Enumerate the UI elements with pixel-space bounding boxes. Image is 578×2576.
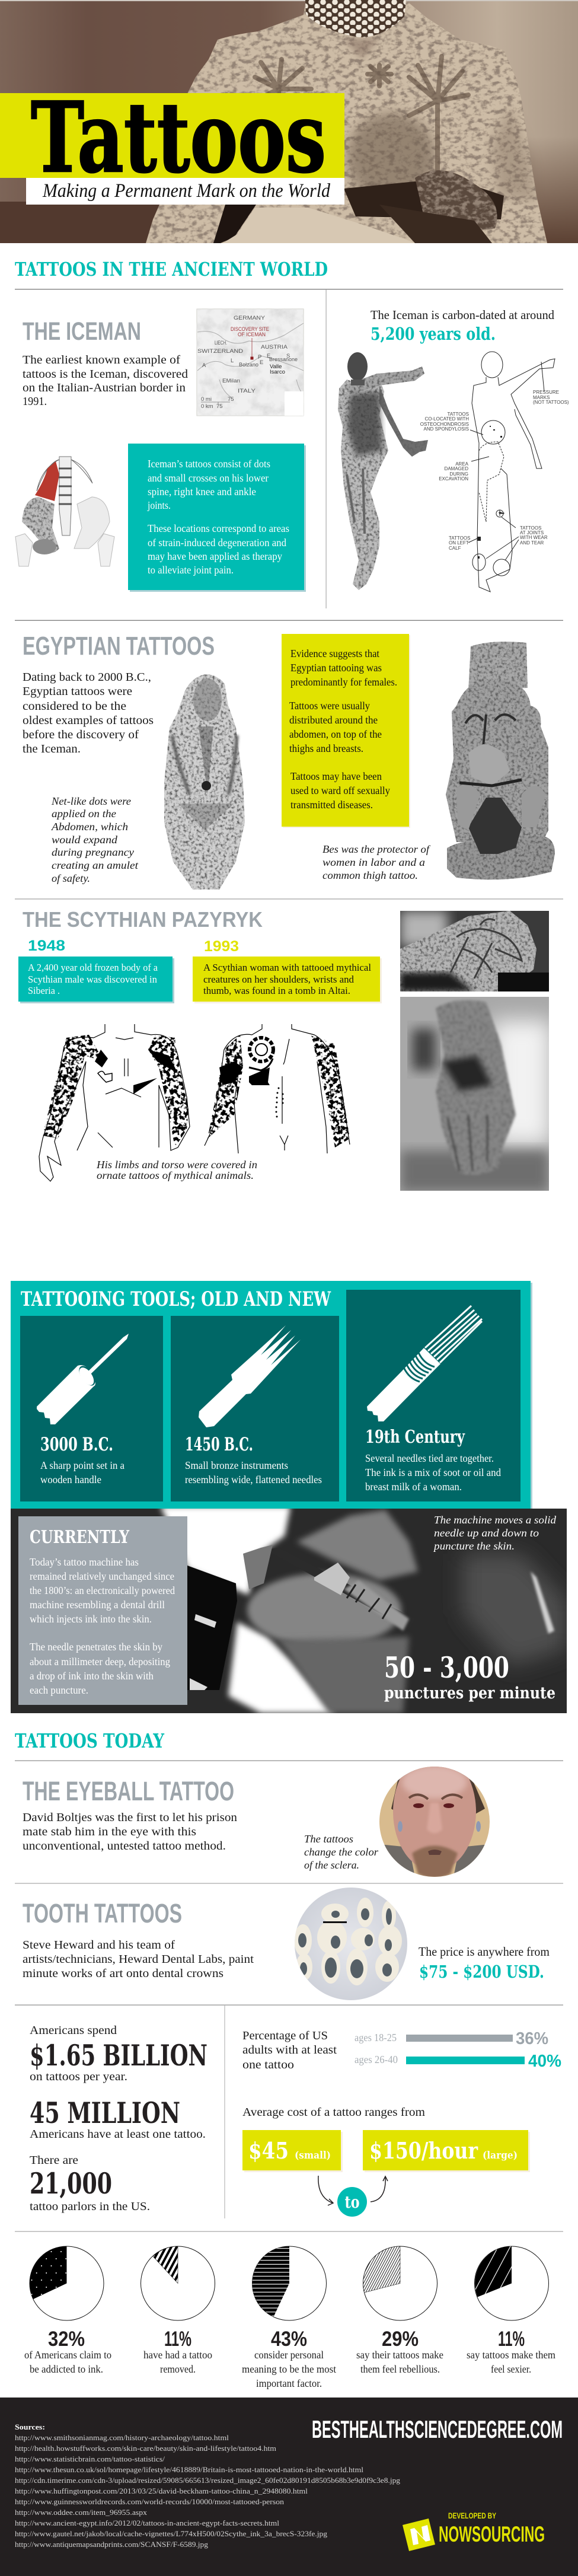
heading: tools: TATTOOING TOOLS; OLD AND NEW (21, 1287, 331, 1311)
callout: evidence: Egyptian tattooing was (290, 662, 382, 674)
callout: tattoo locations: of strain-induced degeneration and (148, 537, 286, 549)
photo: tattooed teeth (294, 1888, 407, 2000)
title banner (0, 81, 344, 205)
description (365, 1452, 501, 1493)
callout: tattoo locations: spine, right knee and ankle (148, 486, 256, 498)
callout: 1993: A Scythian woman with tattooed mythical (203, 962, 371, 973)
percentage label: adults with at least (242, 2043, 337, 2057)
caption: net-like dots: Abdomen, which (51, 821, 128, 833)
map of discovery site: DISCOVERY SITE (231, 326, 269, 333)
sources list: http://www.antiquemapsandprints.com/SCANSF/F-6589.jpg (15, 2540, 209, 2549)
diagram: iceman tattoo locations: AND SPONDYLOSIS (424, 426, 469, 432)
description (40, 1459, 124, 1485)
description (185, 1459, 322, 1485)
callout: evidence: used to ward off sexually (290, 785, 390, 796)
diagram: iceman tattoo locations: AREA (455, 461, 469, 467)
diagram: iceman tattoo locations: TATTOOS (449, 535, 470, 541)
photo: tattooed shoulder (400, 911, 551, 991)
callout: 1948: A 2,400 year old frozen body of a (28, 962, 158, 973)
bar chart: adults with tattoos: ages 26-40 (355, 2054, 398, 2065)
eyeball text: mate stab him in the eye with this (23, 1825, 196, 1838)
photo: man with eyeball tattoo (379, 1767, 490, 1877)
panel: pie charts (24, 2246, 555, 2389)
currently text: machine resembling a dental drill (30, 1599, 165, 1611)
pie: 29% rebellious (356, 2246, 443, 2375)
diagram: iceman tattoo locations: PRESSURE (533, 390, 559, 395)
caption: bes (322, 843, 431, 881)
yellow title block (0, 93, 344, 178)
eyeball text: David Boltjes was the first to let his prison (23, 1811, 237, 1824)
callout: tattoo locations: Iceman’s tattoos consist of dots (148, 458, 270, 470)
currently text: remained relatively unchanged since (30, 1570, 174, 1582)
pie: 32% addicted: 32% (48, 2328, 85, 2351)
map of discovery site: S (286, 353, 290, 359)
map of discovery site: 0 mi (201, 396, 212, 403)
panel: national statistics (30, 2024, 207, 2213)
date: 3000 B.C.: 3000 B.C. (40, 1434, 113, 1455)
main title: Tattoos (31, 81, 326, 195)
currently text: which injects ink into the skin. (30, 1613, 152, 1625)
heading: scythian pazyryk: THE SCYTHIAN PAZYRYK (23, 907, 263, 932)
sources list: http://www.oddee.com/item_96955.aspx (15, 2508, 148, 2517)
pie: 43% personal meaning (242, 2246, 336, 2389)
pie: 32% addicted: be addicted to ink. (30, 2363, 103, 2375)
year: 1993: 1993 (204, 938, 239, 955)
callout: tattoo locations: to alleviate joint pain. (148, 564, 234, 576)
egyptian intro text (23, 671, 154, 755)
diagram: iceman tattoo locations: ON LEFT (449, 540, 469, 546)
bar chart: adults with tattoos (355, 2029, 561, 2071)
sources list (15, 2422, 401, 2549)
caption: sclera: of the sclera. (304, 1859, 359, 1871)
illustration: tattooed torso front and back (39, 1024, 350, 1181)
diagram: iceman tattoo locations: EXCAVATION (439, 476, 468, 482)
currently text: about a millimeter deep, depositing (30, 1656, 170, 1668)
diagram: iceman tattoo locations: TATTOOS (448, 412, 469, 417)
caption: net-like dots (51, 795, 139, 884)
arrow: to large (371, 2176, 388, 2202)
price box: large (363, 2130, 530, 2172)
developer credit (403, 2511, 545, 2551)
callout: evidence: predominantly for females. (290, 676, 397, 688)
eyeball text: unconventional, untested tattoo method. (23, 1839, 226, 1853)
sources list: http://www.smithsonianmag.com/history-archaeology/tattoo.html (15, 2433, 229, 2442)
egyptian intro text: the Iceman. (23, 742, 81, 755)
panel: tattooing tools (11, 1281, 532, 1510)
bar chart: adults with tattoos: 40% (528, 2052, 561, 2071)
eyeball text (23, 1811, 237, 1853)
subtitle block: Making a Permanent Mark on the World (42, 180, 330, 202)
callout: tattoo locations: may have been applied as therapy (148, 550, 282, 562)
developer credit: DEVELOPED BY (448, 2511, 496, 2520)
price box: large: (large) (483, 2150, 518, 2161)
heading: egyptian tattoos: EGYPTIAN TATTOOS (23, 632, 215, 661)
heading: eyeball tattoo: THE EYEBALL TATTOO (23, 1776, 234, 1806)
stat: spending: Americans spend (30, 2024, 117, 2037)
caption: sclera (304, 1833, 379, 1871)
panel: tooth tattoos (23, 1888, 550, 2000)
sources list: Sources: (15, 2422, 45, 2431)
date: 1450 B.C.: 1450 B.C. (185, 1434, 253, 1455)
pie: 43% personal meaning: consider personal (254, 2349, 324, 2361)
carbon dating text (371, 308, 554, 344)
stat: 45 million: Americans have at least one tattoo. (30, 2128, 206, 2141)
currently text: the 1800’s: an electronically powered (30, 1585, 175, 1596)
price box: small (242, 2130, 343, 2172)
pie: 29% rebellious: 29% (382, 2328, 419, 2351)
stat: parlors: There are (30, 2154, 78, 2167)
stat: parlors: tattoo parlors in the US. (30, 2200, 150, 2213)
caption: net-like dots: during pregnancy (52, 846, 134, 858)
price text: The price is anywhere from (419, 1944, 550, 1959)
iceman intro text: tattoos is the Iceman, discovered (23, 368, 188, 381)
badge: to (337, 2187, 367, 2217)
pie: 11% removed: removed. (160, 2363, 196, 2375)
stat: 45 million (30, 2096, 206, 2141)
map of discovery site: OF ICEMAN (238, 331, 266, 338)
pie: 43% personal meaning: meaning to be the most (242, 2363, 336, 2375)
panel: scythian pazyryk (18, 907, 551, 1192)
map of discovery site: GERMANY (234, 315, 266, 321)
caption: machine moves needle: The machine moves a solid (434, 1514, 557, 1526)
description: Several needles tied are together. (365, 1452, 494, 1464)
card: 1450 B.C. (171, 1316, 339, 1501)
sources list: http://www.ancient-egypt.info/2012/02/tattoos-in-ancient-egypt-facts-secrets.html (15, 2518, 279, 2527)
diagram: iceman tattoo locations: TATTOOS (520, 525, 541, 531)
map of discovery site: AUSTRIA (261, 344, 288, 350)
card: 3000 B.C. (20, 1316, 163, 1501)
arrow: small to (318, 2176, 333, 2205)
description: Small bronze instruments (185, 1459, 288, 1471)
map of discovery site: Isarco (270, 369, 285, 375)
caption: net-like dots: creating an amulet (52, 859, 139, 871)
section heading: ancient world: TATTOOS IN THE ANCIENT WORLD (15, 258, 328, 280)
map of discovery site: ITALY (238, 388, 256, 394)
egyptian intro text: before the discovery of (23, 728, 139, 741)
callout: 1993 (193, 957, 382, 1003)
panel: eyeball tattoo (23, 1767, 490, 1877)
price box: small: (small) (295, 2150, 331, 2161)
currently text (30, 1556, 175, 1696)
stat: 45 million: 45 MILLION (30, 2096, 180, 2130)
footer (0, 2398, 578, 2576)
caption: net-like dots: applied on the (52, 808, 116, 820)
stat: spending: $1.65 BILLION (30, 2038, 207, 2073)
pie: 29% rebellious: say their tattoos make (356, 2349, 443, 2361)
percentage label (242, 2029, 337, 2071)
diagram: iceman tattoo locations: AND TEAR (520, 540, 544, 546)
callout: evidence (282, 634, 410, 828)
callout: 1993: thumb, was found in a tomb in Altai. (203, 985, 350, 996)
panel: percentage and cost (242, 2029, 561, 2217)
callout: tattoo locations (128, 444, 306, 592)
currently text: a drop of ink into the skin with (30, 1670, 154, 1682)
caption: limbs and torso: ornate tattoos of mythical animals. (97, 1169, 254, 1181)
iceman age: 5,200 years old. (371, 324, 496, 344)
description: resembling wide, flattened needles (185, 1474, 322, 1485)
iceman intro text: on the Italian-Austrian border in (23, 381, 186, 394)
carbon dating text: The Iceman is carbon-dated at around (371, 308, 554, 322)
egyptian intro text: Egyptian tattoos were (23, 685, 132, 698)
caption: net-like dots: would expand (52, 834, 118, 846)
map of discovery site: L (231, 358, 234, 364)
bar chart: adults with tattoos: ages 18-25 (355, 2032, 397, 2043)
callout: evidence: transmitted diseases. (290, 799, 373, 811)
caption: limbs and torso: His limbs and torso were covered in (96, 1159, 257, 1171)
pie: 11% sexier: feel sexier. (491, 2363, 531, 2375)
sources list: http://www.huffingtonpost.com/2013/03/25/david-beckham-tattoo-china_n_2948080.html (15, 2486, 308, 2495)
currently text: Today’s tattoo machine has (30, 1556, 139, 1568)
caption: bes: common thigh tattoo. (322, 869, 418, 881)
map of discovery site: SWITZERLAND (197, 348, 243, 355)
iceman intro text (23, 353, 188, 408)
callout: evidence: distributed around the (289, 714, 378, 726)
iceman intro text: The earliest known example of (23, 353, 180, 366)
stat: spending: on tattoos per year. (30, 2070, 127, 2083)
description: A sharp point set in a (40, 1459, 124, 1471)
currently text: The needle penetrates the skin by (30, 1641, 162, 1653)
pie: 11% sexier: 11% (498, 2328, 525, 2351)
map of discovery site: Bressanone (269, 356, 298, 363)
sources list: http://www.statisticbrain.com/tattoo-statistics/ (15, 2454, 165, 2463)
caption: sclera: The tattoos (304, 1833, 353, 1845)
callout: tattoo locations: These locations correspond to areas (148, 522, 289, 534)
date: 19th century: 19th Century (365, 1427, 465, 1448)
map of discovery site: E (267, 353, 270, 359)
callout: evidence: abdomen, on top of the (289, 728, 382, 740)
egyptian intro text: considered to be the (23, 700, 126, 713)
diagram: iceman tattoo locations: (NOT TATTOOS) (533, 400, 569, 405)
caption: net-like dots: Net-like dots were (51, 795, 131, 807)
bar chart: adults with tattoos: 36% (516, 2029, 548, 2048)
photo: tattoo machine in hand (11, 1506, 567, 1713)
map of discovery site: 75 (228, 396, 234, 403)
heading: tooth tattoos: TOOTH TATTOOS (23, 1898, 182, 1928)
panel: the iceman (15, 308, 569, 592)
pie: 11% sexier (467, 2246, 555, 2375)
pie: 43% personal meaning: important factor. (256, 2377, 322, 2389)
callout: 1948: Scythian male was discovered in (28, 974, 157, 985)
caption: machine moves needle: puncture the skin. (433, 1540, 515, 1552)
caption: sclera: change the color (304, 1846, 379, 1858)
cost label: Average cost of a tattoo ranges from (242, 2106, 425, 2119)
diagram: iceman tattoo locations: CALF (449, 546, 461, 551)
card: 19th century (346, 1290, 520, 1501)
photo: iceman mummy (338, 352, 428, 590)
diagram: iceman tattoo locations: OSTEOCHONDROSIS (420, 422, 469, 427)
callout: evidence: Tattoos were usually (289, 700, 370, 712)
diagram: iceman tattoo locations: WITH WEAR (520, 535, 548, 540)
map of discovery site: A (202, 362, 206, 369)
description: breast milk of a woman. (365, 1481, 462, 1493)
year: 1948: 1948 (28, 938, 65, 954)
pie: 32% addicted (24, 2246, 111, 2375)
tooth text: minute works of art onto dental crowns (23, 1967, 223, 1980)
icon: tied needles (367, 1306, 482, 1421)
caption: machine moves needle (433, 1514, 557, 1552)
map of discovery site (197, 308, 304, 416)
map of discovery site: E (260, 359, 263, 366)
description: wooden handle (40, 1474, 101, 1485)
photo: tattooed figurine (164, 674, 245, 890)
diagram: iceman tattoo locations: MARKS (533, 395, 550, 400)
map of discovery site: LIECH. (215, 340, 227, 346)
diagram: iceman tattoo locations: DAMAGED (445, 466, 468, 471)
iceman intro text: 1991. (23, 395, 47, 408)
caption: bes: Bes was the protector of (322, 843, 431, 855)
section heading: tattoos today: TATTOOS TODAY (15, 1729, 164, 1752)
hero photo: tattooed woman (0, 0, 578, 243)
pie: 11% removed: 11% (164, 2328, 191, 2351)
map of discovery site: 75 (216, 403, 223, 410)
icon: nowsourcing logo (403, 2518, 435, 2551)
badge: to: to (345, 2192, 359, 2212)
map of discovery site: EMilan (222, 378, 240, 384)
sources list: http://www.gautel.net/jakob/local/cache-vignettes/L774xH500/02Scythe_ink_3a_brecS-323fe.jpg (15, 2529, 328, 2538)
stat: spending (30, 2024, 207, 2083)
caption: limbs and torso (96, 1159, 257, 1181)
diagram: iceman tattoo locations: CO-LOCATED WITH (424, 416, 469, 422)
tooth text: Steve Heward and his team of (23, 1939, 175, 1952)
callout: 1993: creatures on her shoulders, wrists and (203, 974, 354, 985)
callout: evidence: thighs and breasts. (289, 742, 363, 754)
sources list: http://www.guinnessworldrecords.com/world-records/10000/most-tattooed-person (15, 2497, 285, 2506)
price range: $75 - $200 USD. (419, 1962, 544, 1982)
map of discovery site: 0 km (201, 403, 213, 410)
diagram: iceman tattoo locations: AT JOINTS (520, 530, 544, 535)
percentage label: Percentage of US (242, 2029, 328, 2042)
currently text: each puncture. (30, 1684, 88, 1696)
stat: punctures per minute: punctures per minute (384, 1684, 555, 1703)
illustration: spine and pelvis (15, 457, 114, 566)
icon: sharp point in handle (37, 1334, 129, 1424)
description: The ink is a mix of soot or oil and (365, 1466, 501, 1478)
map of discovery site: Bolzano (239, 362, 258, 368)
panel: currently, tattoo machine photo (11, 1506, 567, 1713)
pie: 11% sexier: say tattoos make them (467, 2349, 555, 2361)
map of discovery site: Valle (270, 364, 282, 370)
egyptian intro text: oldest examples of tattoos (23, 714, 154, 727)
diagram: iceman tattoo locations: DURING (449, 471, 468, 477)
pie: 43% personal meaning: 43% (271, 2328, 307, 2351)
heading: the iceman: THE ICEMAN (23, 317, 141, 346)
percentage label: one tattoo (242, 2058, 294, 2071)
stat: parlors (30, 2154, 150, 2213)
callout: tattoo locations: and small crosses on his lower (148, 472, 269, 484)
map of discovery site: P (258, 354, 261, 361)
callout: 1948: Siberia . (28, 985, 60, 996)
price box: small: $45 (248, 2137, 289, 2164)
price text (419, 1944, 550, 1982)
callout: evidence: Evidence suggests that (290, 648, 379, 659)
sources list: http://www.thesun.co.uk/sol/homepage/lifestyle/4618889/Britain-is-most-tattooed-nation-in-the-world.html (15, 2465, 363, 2474)
callout: 1948 (18, 957, 174, 1003)
pie: 32% addicted: of Americans claim to (24, 2349, 111, 2361)
pie: 11% removed: have had a tattoo (143, 2349, 212, 2361)
tooth text: artists/technicians, Heward Dental Labs, paint (23, 1953, 254, 1966)
egyptian intro text: Dating back to 2000 B.C., (23, 671, 151, 684)
panel: egyptian tattoos (23, 632, 555, 890)
diagram: iceman tattoo locations (420, 352, 569, 592)
caption: bes: women in labor and a (322, 856, 425, 868)
stat: punctures per minute (384, 1650, 555, 1703)
callout: currently (18, 1516, 187, 1705)
pie: 29% rebellious: them feel rebellious. (360, 2363, 440, 2375)
caption: net-like dots: of safety. (52, 872, 90, 884)
sources list: http://cdn.timerime.com/cdn-3/upload/resized/59085/665613/resized_image2_60fe02d80191d8505b68b3e9d0f9c3e8.jpg (15, 2476, 401, 2485)
caption: machine moves needle: needle up and down to (434, 1527, 539, 1539)
photo: tattooed hand (400, 997, 551, 1192)
icon: bronze instrument (199, 1325, 301, 1427)
sources list: http://health.howstuffworks.com/skin-care/beauty/skin-and-lifestyle/tattoo4.htm (15, 2444, 276, 2453)
price box: large: $150/hour (369, 2137, 478, 2164)
pie: 11% removed (141, 2246, 215, 2375)
stat: parlors: 21,000 (30, 2166, 112, 2201)
callout: tattoo locations: joints. (147, 499, 171, 511)
heading: currently: CURRENTLY (30, 1527, 129, 1548)
photo: bes statue (446, 642, 555, 879)
tooth text (23, 1939, 254, 1980)
stat: punctures per minute: 50 - 3,000 (384, 1650, 509, 1685)
callout: evidence: Tattoos may have been (290, 770, 382, 782)
